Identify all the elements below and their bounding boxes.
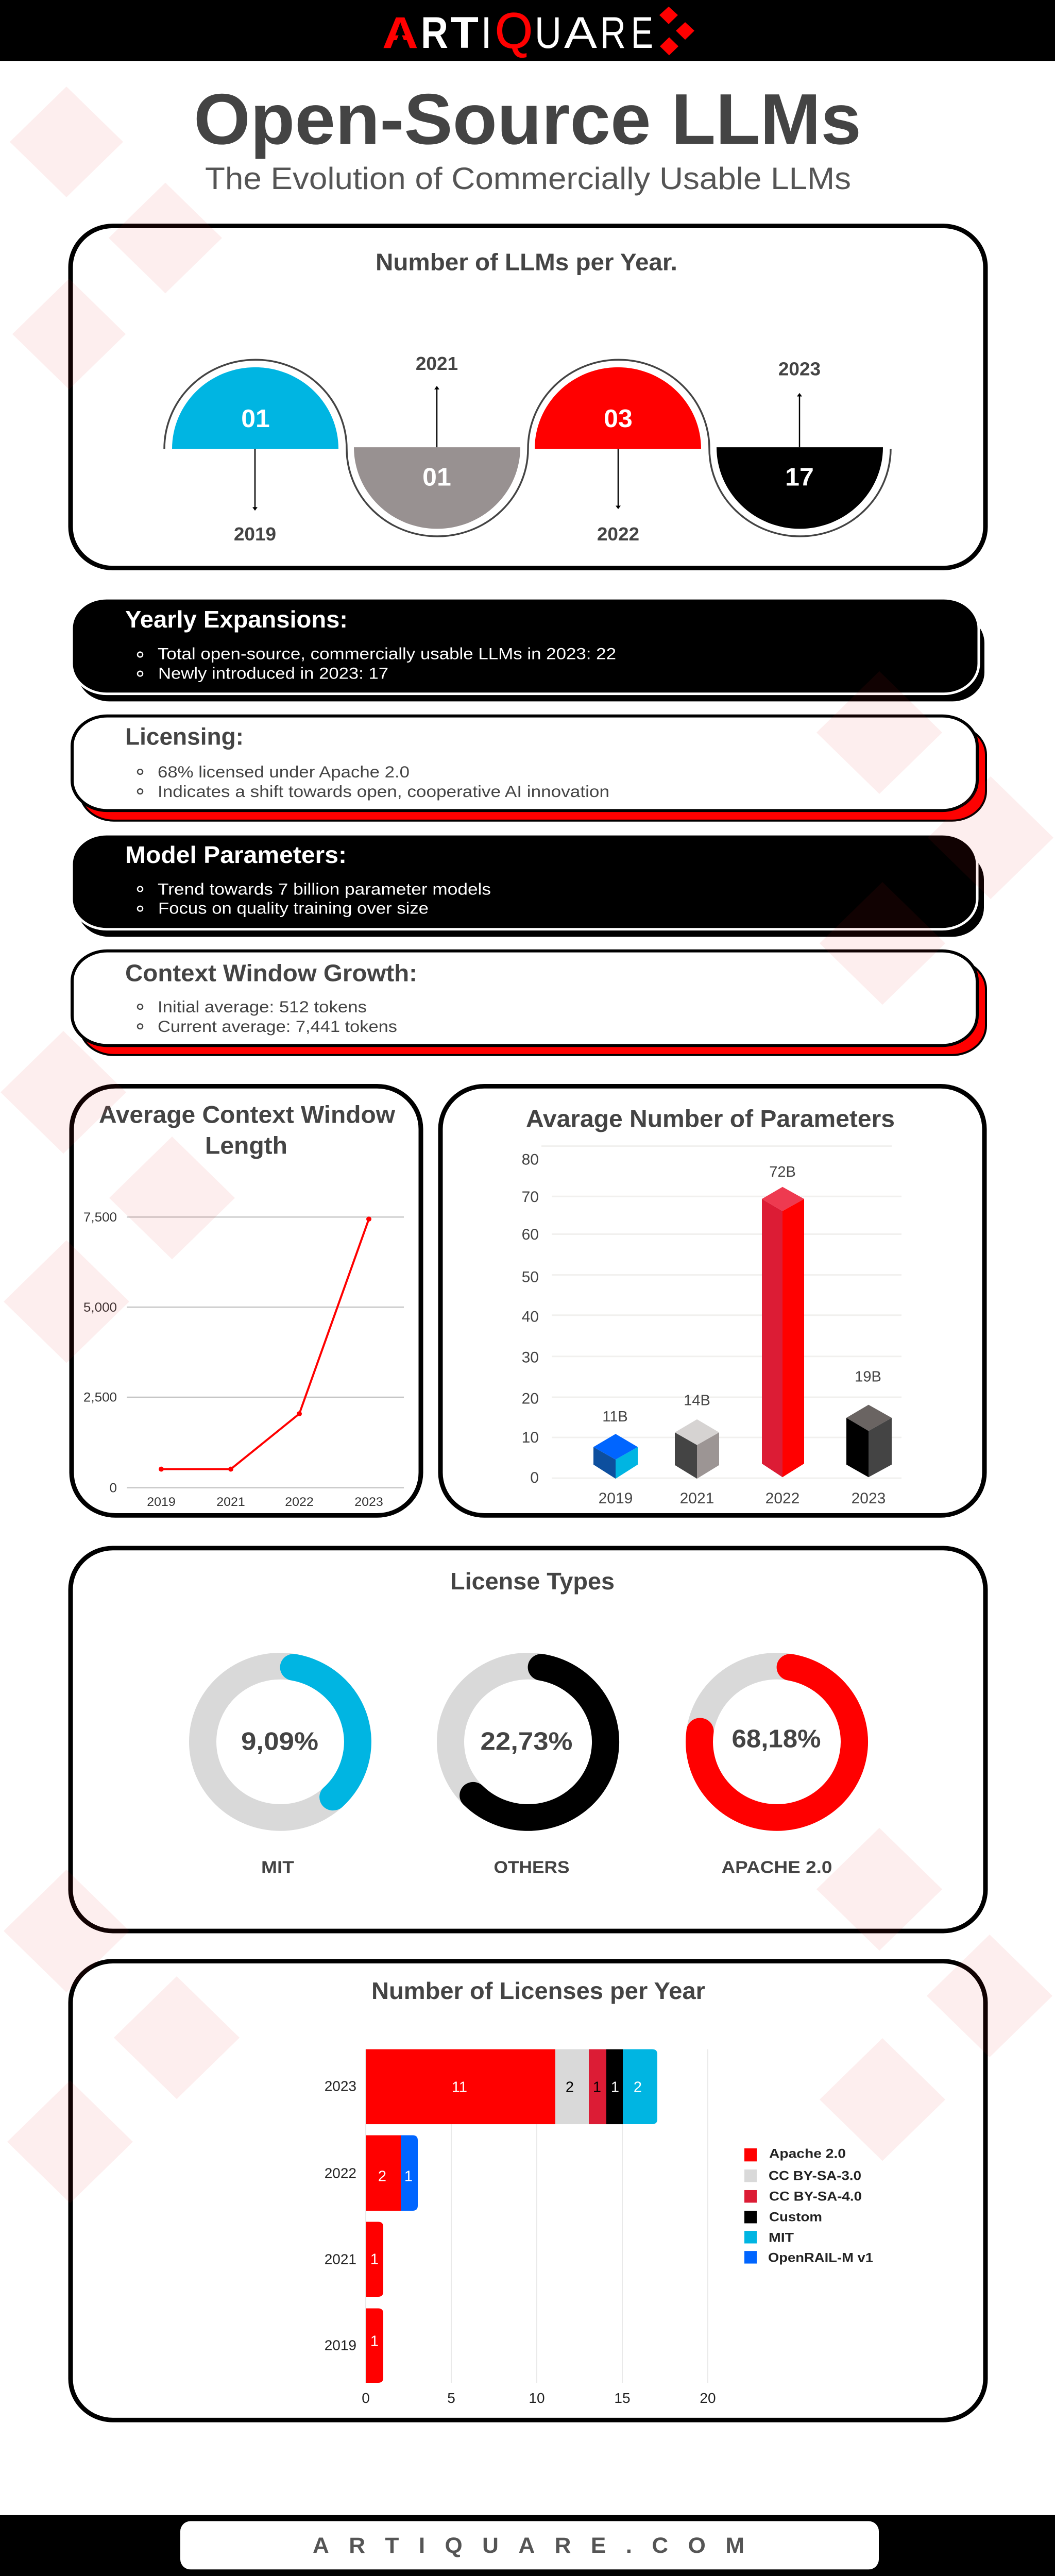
panel: average number of parameters (440, 1086, 984, 1515)
panel: license types (71, 1548, 985, 1931)
panel: average context window length (72, 1086, 421, 1515)
semicircle 2019 (172, 367, 338, 449)
x axis labels: 5 (447, 2390, 455, 2406)
legend: Apache 2.0 (769, 2147, 846, 2161)
x axis labels: 2023 (852, 1490, 886, 1507)
heading: license types: License Types (450, 1568, 615, 1595)
bar value labels: 14B (684, 1393, 710, 1409)
arrow and label 2019: 2019 (234, 523, 276, 545)
semicircle 2022: 03 (604, 405, 633, 433)
legend: MIT (769, 2231, 794, 2245)
header bar with logo: R (600, 8, 626, 58)
bar 2019 (366, 2308, 383, 2383)
y axis labels (325, 2078, 356, 2353)
arrow and label 2021: 2021 (416, 353, 458, 374)
y axis labels: 60 (522, 1227, 539, 1243)
x axis labels: 10 (529, 2390, 545, 2406)
stacked bar 2023 (366, 2049, 657, 2124)
x axis labels: 2023 (354, 1495, 383, 1509)
y axis labels: 2019 (325, 2337, 356, 2353)
donut: others (450, 1666, 606, 1877)
bar value labels (602, 1164, 881, 1425)
bar 2021 (675, 1419, 719, 1479)
semicircle 2023: 17 (785, 463, 814, 491)
panel: yearly expansions (72, 598, 984, 701)
panel: licensing: 68% licensed under Apache 2.0 (158, 762, 410, 781)
line chart (159, 1216, 371, 1471)
arrow and label 2022: 2022 (597, 523, 639, 545)
stacked bar 2023: 2 (634, 2079, 642, 2095)
panel: model parameters: Trend towards 7 billion parameter models (158, 880, 491, 898)
donut: apache 2.0: APACHE 2.0 (722, 1858, 832, 1877)
bar 2019: 1 (370, 2333, 379, 2350)
panel: model parameters (72, 834, 984, 937)
donut: others: OTHERS (494, 1858, 570, 1877)
bar value labels: 19B (855, 1369, 881, 1385)
donut: MIT: MIT (261, 1858, 295, 1877)
panel: context window growth: Initial average: 512 tokens (158, 997, 367, 1016)
header bar with logo: R (421, 8, 448, 58)
heading: parameters: Avarage Number of Parameters (526, 1106, 895, 1132)
bar 2021: 1 (370, 2251, 379, 2267)
x axis labels (147, 1495, 383, 1509)
header bar with logo: A (382, 8, 418, 58)
heading: licenses per year: Number of Licenses per Year (371, 1977, 705, 2004)
y axis labels: 40 (522, 1309, 539, 1325)
header bar with logo (0, 0, 1055, 61)
y axis labels: 50 (522, 1269, 539, 1285)
x axis labels: 20 (700, 2390, 716, 2406)
panel: model parameters: Focus on quality training over size (158, 899, 429, 917)
panel: number of LLMs per year (71, 226, 985, 568)
y axis labels: 2023 (325, 2078, 356, 2094)
header bar with logo: A (564, 8, 597, 58)
bar value labels: 72B (769, 1164, 796, 1180)
y axis labels: 80 (522, 1151, 539, 1168)
stacked bar 2022: 1 (404, 2168, 413, 2184)
header bar with logo: Q (495, 3, 533, 59)
stacked bar 2022: 2 (378, 2168, 386, 2184)
y axis labels: 10 (522, 1429, 539, 1446)
arrow and label 2023 (778, 359, 821, 447)
stacked bar 2023: 1 (611, 2079, 619, 2095)
header bar with logo: E (631, 8, 653, 58)
legend: Custom (769, 2210, 822, 2224)
footer bar with website (0, 2515, 1055, 2576)
header bar with logo: U (535, 8, 561, 58)
heading: context window (99, 1101, 395, 1159)
semicircle 2021 (354, 447, 520, 529)
y axis labels: 2,500 (83, 1391, 117, 1405)
stacked bar 2022 (366, 2136, 418, 2211)
semicircle 2023 (717, 447, 883, 529)
donut: apache 2.0: 68,18% (732, 1725, 821, 1753)
panel: context window growth: Current average: 7,441 tokens (158, 1017, 397, 1036)
bar 2019 (593, 1434, 638, 1479)
x axis labels: 15 (614, 2390, 631, 2406)
y axis labels: 20 (522, 1391, 539, 1408)
footer bar with website: ARTIQUARE.COM (313, 2534, 744, 2558)
bar 2022 (762, 1187, 804, 1477)
subtitle: The Evolution of Commercially Usable LLMs (205, 161, 851, 196)
x axis labels: 2022 (285, 1495, 314, 1509)
stacked bar 2023: 2 (566, 2079, 574, 2095)
donut: MIT (203, 1666, 358, 1877)
arrow and label 2023: 2023 (778, 359, 821, 379)
panel: number of licenses per year (71, 1961, 985, 2420)
panel: licensing: Indicates a shift towards open, cooperative AI innovation (158, 782, 609, 801)
arrow and label 2022 (597, 449, 639, 545)
panel: yearly expansions: Total open-source, commercially usable LLMs in 2023: 22 (158, 645, 616, 663)
semicircle 2021: 01 (422, 463, 451, 491)
heading: LLMs per year: Number of LLMs per Year. (376, 249, 677, 275)
panel: context window growth: Context Window Growth: (125, 960, 417, 986)
donut: apache 2.0 (700, 1666, 855, 1877)
legend: CC BY-SA-4.0 (769, 2190, 862, 2204)
x axis labels: 2022 (765, 1490, 799, 1507)
panel: yearly expansions: Newly introduced in 2023: 17 (158, 664, 388, 682)
y axis labels: 5,000 (83, 1300, 117, 1315)
x axis labels (599, 1490, 886, 1507)
x axis labels: 2019 (599, 1490, 633, 1507)
panel: yearly expansions: Yearly Expansions: (125, 606, 348, 633)
x axis labels: 2019 (147, 1495, 176, 1509)
stacked bar 2023: 1 (593, 2079, 601, 2095)
wave outline (164, 360, 891, 536)
donut: others: 22,73% (481, 1727, 573, 1755)
panel: licensing: Licensing: (125, 723, 244, 750)
header bar with logo: T (450, 8, 479, 58)
y axis labels: 2021 (325, 2251, 356, 2267)
y axis labels: 2022 (325, 2165, 356, 2181)
x axis labels: 2021 (216, 1495, 245, 1509)
x axis labels (362, 2390, 716, 2406)
heading: context window: Average Context Window (99, 1101, 395, 1129)
x axis labels: 0 (362, 2390, 370, 2406)
semicircle 2019: 01 (241, 405, 270, 433)
bar value labels: 11B (602, 1409, 628, 1425)
bar 2021 (366, 2222, 383, 2297)
panel: licensing (72, 716, 986, 821)
arrow and label 2019 (234, 449, 276, 545)
legend (744, 2147, 873, 2265)
heading: context window: Length (205, 1132, 287, 1159)
legend: OpenRAIL-M v1 (768, 2251, 873, 2265)
legend: CC BY-SA-3.0 (769, 2169, 861, 2183)
panel: model parameters: Model Parameters: (125, 841, 347, 868)
y axis labels (522, 1151, 539, 1486)
panel: context window growth (72, 951, 986, 1055)
x axis labels: 2021 (680, 1490, 714, 1507)
y axis labels: 30 (522, 1349, 539, 1366)
y axis labels: 0 (110, 1481, 117, 1495)
y axis labels (83, 1210, 117, 1495)
y axis labels: 7,500 (83, 1210, 117, 1225)
header bar with logo: I (483, 8, 490, 58)
donut: MIT: 9,09% (241, 1727, 318, 1755)
arrow and label 2021 (416, 353, 458, 447)
semicircle 2022 (535, 367, 701, 449)
stacked bar 2023: 11 (452, 2079, 467, 2095)
y axis labels: 0 (530, 1469, 539, 1486)
title: Open-Source LLMs (194, 79, 861, 159)
bar 2023 (846, 1405, 892, 1477)
y axis labels: 70 (522, 1189, 539, 1206)
